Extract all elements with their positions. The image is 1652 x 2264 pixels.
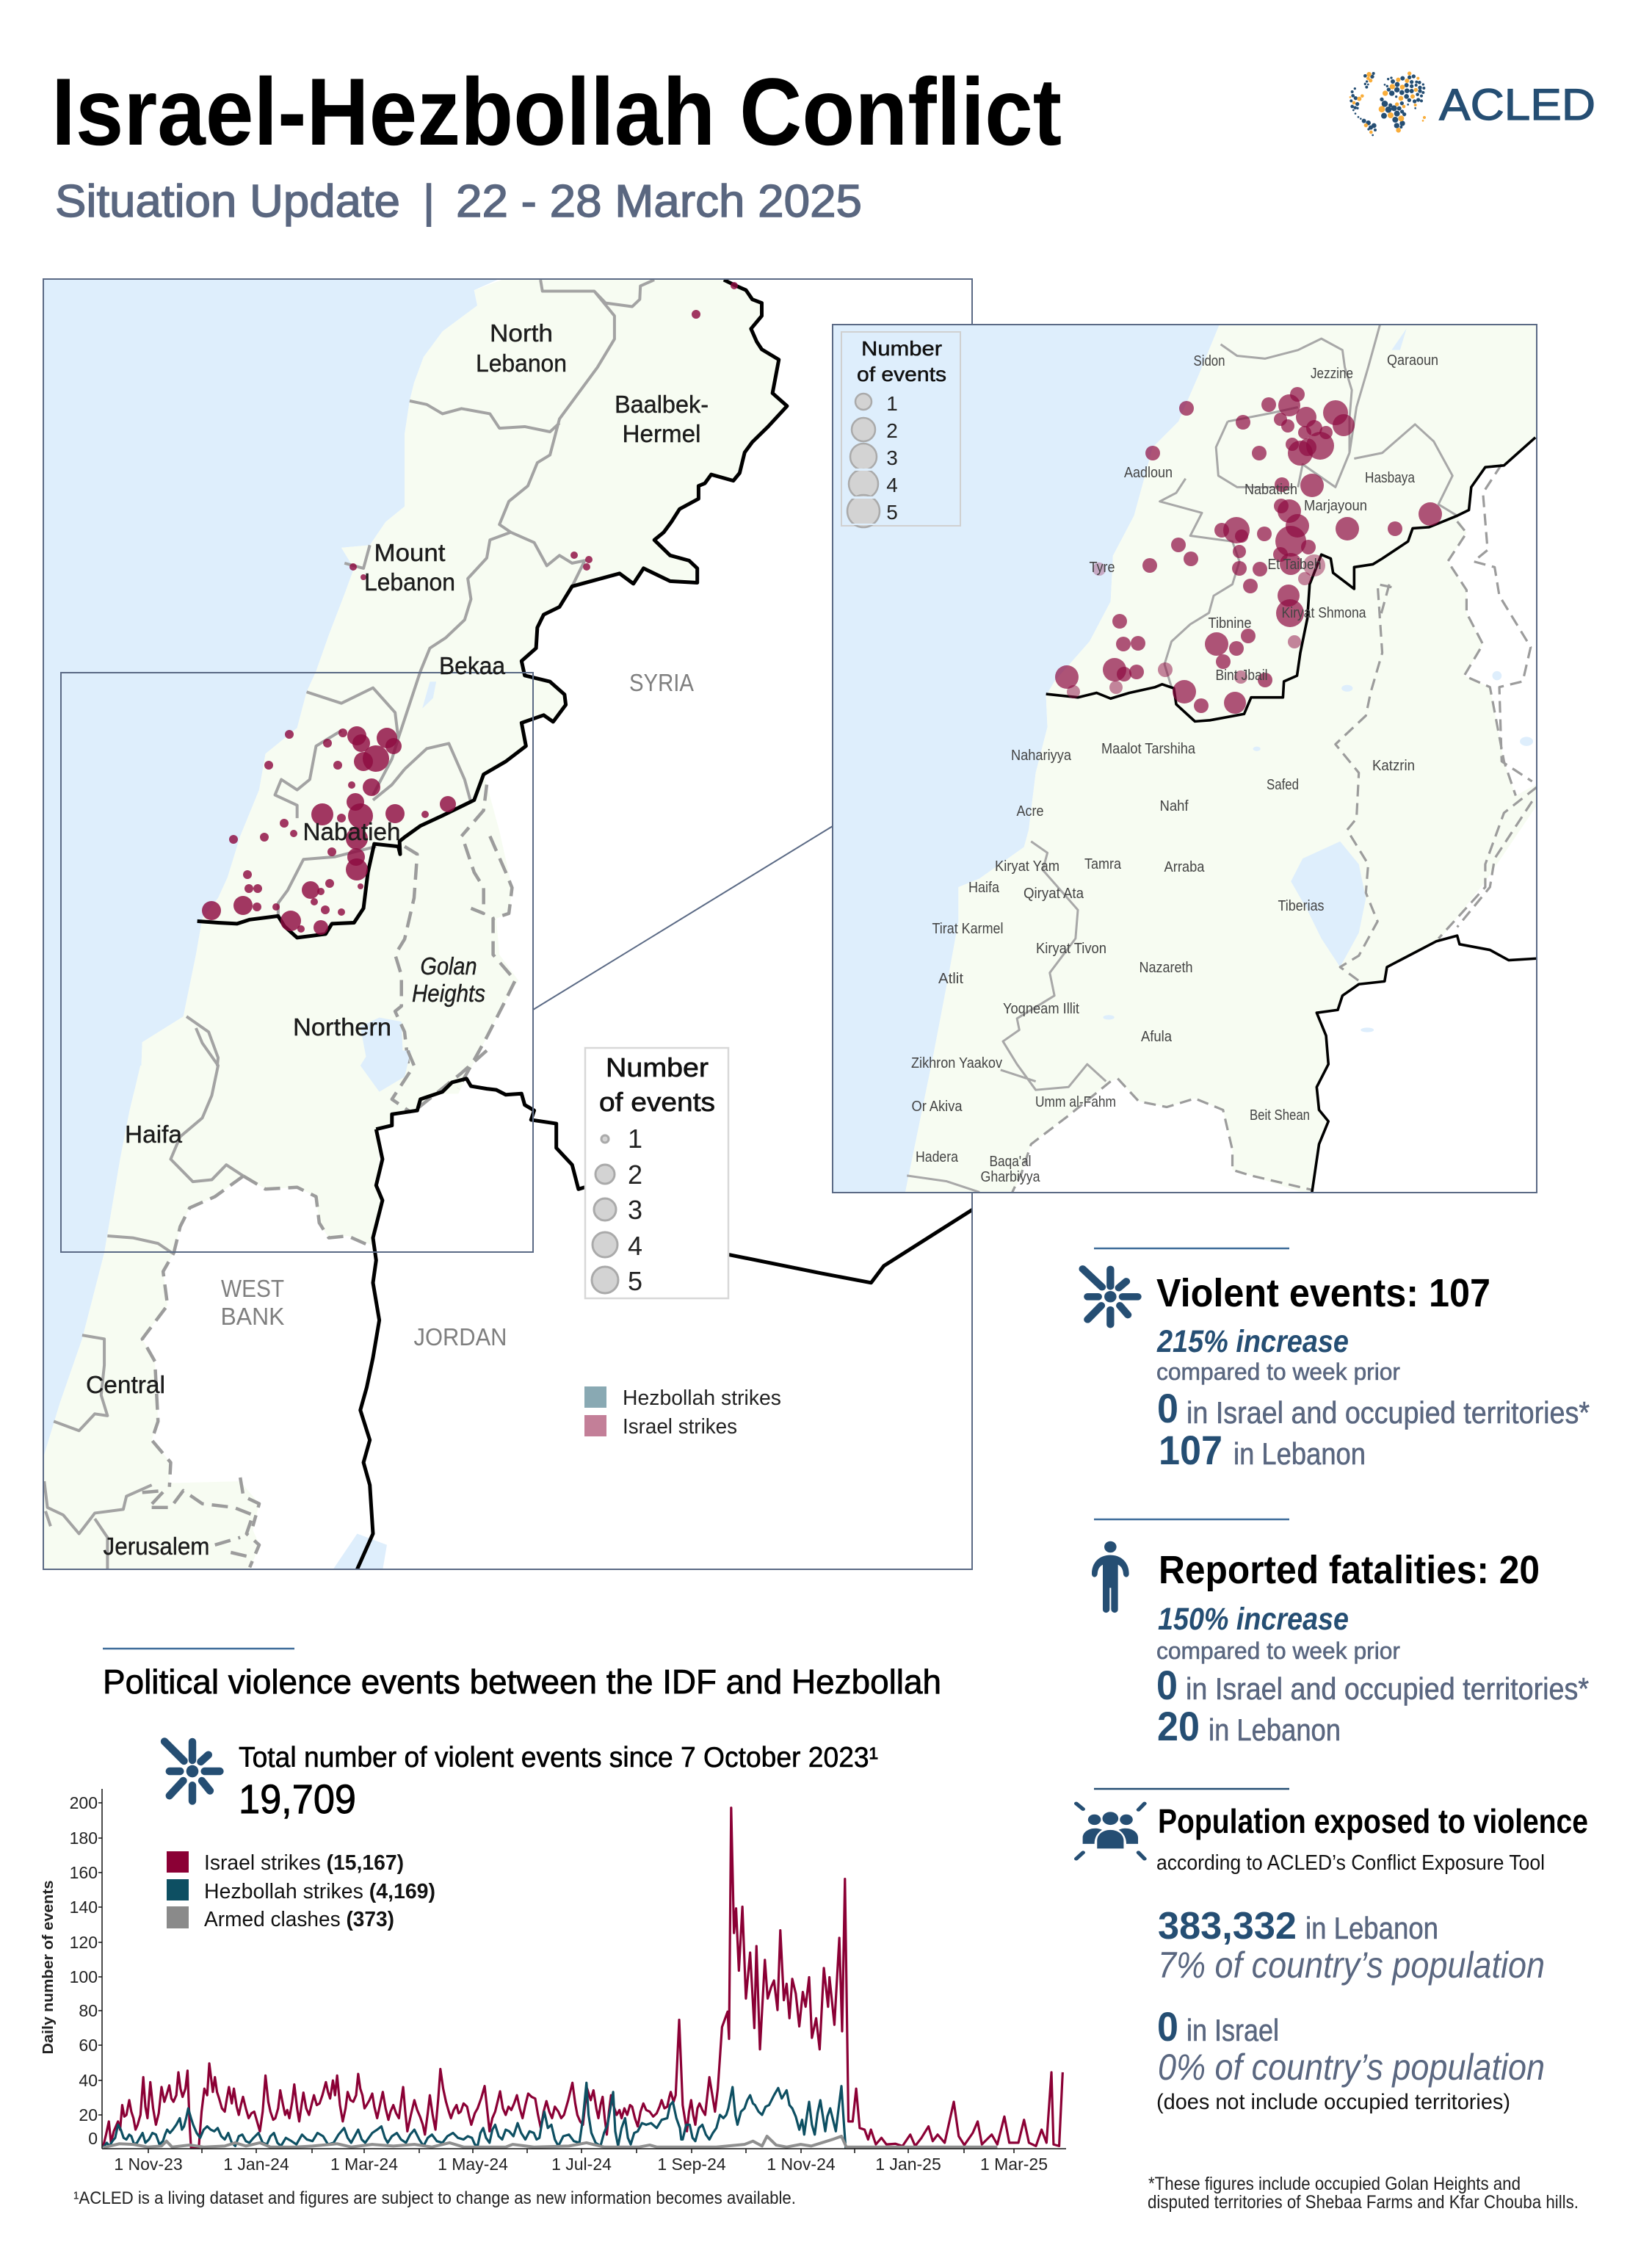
inset map place labels: Nahariyya (1011, 748, 1072, 764)
ACLED logo: ACLED (1439, 80, 1595, 129)
inset map place labels: Umm al-Fahm (1035, 1094, 1116, 1110)
panel: population exposed: 7% of country’s population (1158, 1945, 1545, 1986)
inset map place labels: Kiryat Tivon (1036, 941, 1106, 957)
panel: violent events: 215% increase (1156, 1324, 1349, 1359)
inset map place labels: Kiryat Yam (995, 858, 1059, 875)
map legend: number of events: 2 (628, 1160, 642, 1190)
map north section: Lebanon and northern Israel (38, 275, 787, 1093)
inset map place labels: Jezzine (1311, 366, 1353, 382)
main map place labels: Nabatieh (302, 818, 401, 845)
line chart: daily events (40, 1789, 1066, 2174)
total events text: Total number of violent events since 7 October 2023¹ (239, 1742, 878, 1773)
map legend: number of events (585, 1048, 728, 1298)
main map place labels: Heights (412, 980, 485, 1007)
y axis labels: 120 (70, 1933, 98, 1952)
map legend: number of events: 4 (628, 1231, 642, 1261)
main map place labels: Mount (374, 539, 445, 566)
main map place labels: Haifa (125, 1121, 183, 1148)
map legend: strike colours: Israel strikes (623, 1415, 737, 1439)
inset map place labels: Baqa'al (990, 1154, 1031, 1170)
map legend: number of events: of events (599, 1087, 715, 1117)
inset map place labels: Arraba (1164, 859, 1205, 875)
inset map place labels: Hasbaya (1365, 470, 1416, 486)
footnote: occupied territories (1148, 2174, 1579, 2213)
chart legend: Hezbollah strikes (4,169) (204, 1880, 435, 1903)
panel: violent events: 0 (1157, 1385, 1178, 1431)
y axis labels: 0 (88, 2129, 98, 2148)
subtitle (55, 176, 862, 227)
inset map place labels (911, 352, 1438, 1185)
y axis labels: 180 (70, 1829, 98, 1848)
panel: timeline section (40, 1649, 1066, 2208)
title: Israel-Hezbollah Conflict (51, 58, 1062, 165)
inset map place labels: Bint Jbail (1216, 668, 1267, 684)
x axis labels: 1 Jan-25 (875, 2155, 941, 2174)
inset map place labels: Tyre (1090, 560, 1115, 576)
inset map place labels: Yoqneam Illit (1003, 1001, 1079, 1017)
y axis labels: 160 (70, 1863, 98, 1882)
subtitle: | (423, 176, 435, 227)
section heading: Political violence events between the IDF and Hezbollah (103, 1663, 941, 1701)
y axis labels: 200 (70, 1793, 98, 1812)
inset map place labels: Nazareth (1140, 960, 1192, 976)
inset map place labels: Et Taibeh (1267, 557, 1322, 573)
x axis labels: 1 Sep-24 (657, 2155, 726, 2174)
main map frame (43, 279, 972, 1569)
main map place labels: North (490, 319, 553, 347)
zoom extent rectangle (61, 673, 533, 1252)
inset legend: number of events: 1 (886, 392, 898, 415)
panel: violent events: Violent events: 107 (1156, 1271, 1490, 1315)
main map panel (38, 275, 972, 1571)
panel: population exposed: in Lebanon (1305, 1911, 1438, 1945)
y axis labels: 100 (70, 1967, 98, 1986)
inset map place labels: Safed (1267, 777, 1299, 793)
main map place labels: Lebanon (476, 350, 567, 377)
map legend: number of events: 1 (628, 1124, 642, 1154)
main map place labels: Lebanon (364, 568, 455, 596)
inset map place labels: Maalot Tarshiha (1101, 741, 1196, 757)
y axis labels: 80 (79, 2001, 98, 2020)
inset map place labels: Atlit (938, 971, 963, 987)
ACLED logo (1350, 72, 1595, 136)
connector line from extent box to inset (533, 826, 833, 1010)
inset legend: number of events: Number (861, 337, 942, 360)
subtitle: Situation Update (55, 176, 400, 227)
panel: reported fatalities: in Lebanon (1209, 1713, 1341, 1747)
main map place labels: Hermel (623, 420, 700, 447)
inset map place labels: Zikhron Yaakov (911, 1055, 1002, 1071)
y axis labels: 20 (79, 2105, 98, 2124)
inset map place labels: Tirat Karmel (932, 921, 1003, 937)
y axis title: Daily number of events (40, 1880, 57, 2055)
chart legend: Armed clashes (373) (204, 1908, 394, 1931)
footnote: living dataset: ¹ACLED is a living dataset and figures are subject to change as new information becomes available. (73, 2188, 796, 2208)
x axis labels: 1 May-24 (438, 2155, 508, 2174)
panel: reported fatalities: compared to week prior (1156, 1638, 1400, 1664)
panel: population exposed: 0 (1157, 2003, 1178, 2050)
inset map place labels: Nabatieh (1245, 482, 1297, 498)
panel: violent events: in Lebanon (1233, 1436, 1366, 1471)
y axis labels (70, 1793, 98, 2148)
inset map place labels: Hadera (916, 1149, 959, 1165)
inset map place labels: Tibnine (1209, 615, 1251, 632)
inset map place labels: Haifa (968, 880, 1000, 896)
main map place labels: Northern (293, 1013, 391, 1041)
x axis labels: 1 Nov-23 (114, 2155, 183, 2174)
panel: reported fatalities (1092, 1519, 1589, 1749)
map legend: strike colours: Hezbollah strikes (623, 1386, 781, 1410)
icon: violence burst small (164, 1741, 220, 1801)
inset map place labels: Beit Shean (1250, 1107, 1310, 1124)
main map place labels: WEST (221, 1275, 284, 1302)
main map place labels: Jerusalem (103, 1533, 210, 1560)
inset map place labels: Nahf (1160, 798, 1189, 814)
map legend: number of events: Number (606, 1052, 709, 1082)
inset map place labels: Or Akiva (912, 1099, 963, 1115)
inset map panel (830, 322, 1541, 1196)
panel: population exposed: Population exposed to violence (1158, 1802, 1588, 1840)
panel: reported fatalities: 20 (1157, 1703, 1200, 1749)
panel: population exposed: 383,332 (1158, 1905, 1297, 1947)
inset map place labels: Aadloun (1124, 465, 1173, 481)
inset map place labels: Afula (1141, 1029, 1173, 1045)
main map place labels: Bekaa (439, 652, 506, 679)
panel: reported fatalities: Reported fatalities: 20 (1159, 1548, 1540, 1592)
main map place labels: BANK (220, 1303, 285, 1330)
inset legend: number of events: 4 (886, 474, 898, 496)
map south section: central Israel and Jordan border (38, 1028, 972, 1572)
inset legend: number of events: 5 (886, 501, 898, 524)
y axis labels: 40 (79, 2071, 98, 2090)
inset map place labels: Katzrin (1372, 758, 1415, 774)
panel: violent events: in Israel and occupied territories* (1187, 1395, 1590, 1430)
panel: reported fatalities: 0 (1156, 1662, 1178, 1708)
panel: violent events (1083, 1248, 1590, 1473)
panel: population exposed: according to ACLED’s Conflict Exposure Tool (1156, 1851, 1545, 1875)
panel: violent events: 107 (1159, 1427, 1222, 1473)
main map place labels: Baalbek- (615, 391, 709, 418)
inset legend: number of events: of events (857, 363, 946, 386)
map legend: number of events: 3 (628, 1195, 642, 1225)
total events number: 19,709 (239, 1776, 356, 1822)
main map place labels: SYRIA (629, 669, 694, 696)
chart axes (98, 1789, 1066, 2153)
inset legend: number of events: 2 (886, 419, 898, 442)
inset map place labels: Kiryat Shmona (1282, 605, 1366, 621)
panel: population exposed: 0% of country’s population (1158, 2047, 1545, 2088)
panel: reported fatalities: in Israel and occupied territories* (1186, 1671, 1589, 1706)
chart legend (167, 1851, 435, 1931)
inset legend: number of events: 3 (886, 446, 898, 469)
panel: reported fatalities: 150% increase (1158, 1602, 1349, 1637)
main map place labels: Golan (420, 952, 477, 980)
map legend: number of events: 5 (628, 1266, 642, 1296)
x axis labels: 1 Jul-24 (551, 2155, 612, 2174)
footnote: occupied territories: *These figures include occupied Golan Heights and (1148, 2174, 1521, 2194)
map legend: strike colours (584, 1386, 781, 1439)
subtitle: 22 - 28 March 2025 (456, 176, 862, 227)
x axis labels (114, 2155, 1048, 2174)
inset map frame (833, 325, 1537, 1193)
icon: person (1092, 1541, 1129, 1613)
inset map place labels: Sidon (1194, 353, 1225, 369)
inset map place labels: Gharbiyya (981, 1169, 1040, 1185)
x axis labels: 1 Nov-24 (767, 2155, 836, 2174)
x axis labels: 1 Jan-24 (223, 2155, 289, 2174)
main map place labels: Central (86, 1371, 165, 1398)
inset map place labels: Acre (1016, 803, 1044, 820)
panel: population exposed: in Israel (1187, 2013, 1279, 2047)
inset map place labels: Tamra (1084, 856, 1122, 872)
event markers on main map (202, 282, 738, 935)
panel: population exposed: (does not include occupied territories) (1156, 2090, 1510, 2114)
chart legend: Israel strikes (15,167) (204, 1851, 404, 1875)
footnote: occupied territories: disputed territories of Shebaa Farms and Kfar Chouba hills. (1148, 2192, 1579, 2213)
x axis labels: 1 Mar-24 (330, 2155, 398, 2174)
main map place labels: JORDAN (414, 1323, 507, 1350)
inset legend: number of events (841, 332, 960, 527)
icon: people group (1076, 1804, 1145, 1859)
inset map place labels: Marjayoun (1304, 498, 1367, 514)
event markers on inset map (1055, 387, 1442, 714)
inset map place labels: Qiryat Ata (1024, 886, 1084, 902)
main map place labels (86, 319, 709, 1560)
inset map place labels: Qaraoun (1387, 352, 1438, 369)
panel: violent events: compared to week prior (1156, 1359, 1400, 1385)
y axis labels: 60 (79, 2036, 98, 2055)
icon: violence burst (1083, 1269, 1138, 1325)
inset map place labels: Tiberias (1278, 898, 1325, 914)
panel: population exposed (1076, 1789, 1588, 2114)
y axis labels: 140 (70, 1898, 98, 1917)
x axis labels: 1 Mar-25 (980, 2155, 1048, 2174)
